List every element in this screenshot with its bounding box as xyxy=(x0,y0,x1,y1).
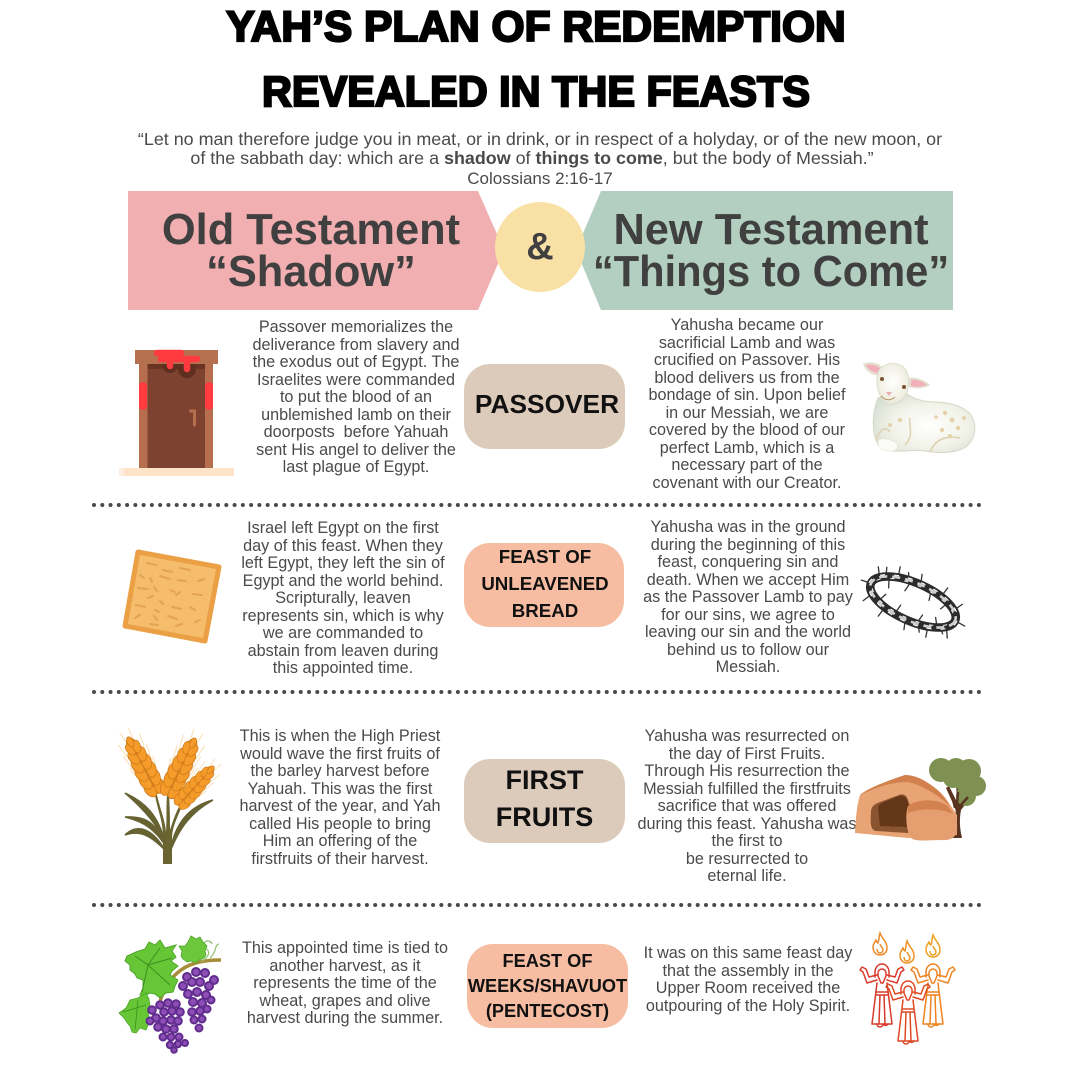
heading: new testament things to come: “Things to Come” xyxy=(593,248,949,296)
text: first fruits new testament: during this feast. Yahusha was xyxy=(638,814,856,832)
pill: feast of weeks: FEAST OF xyxy=(503,950,592,970)
text: unleavened bread old testament: left Egypt, they left the sin of xyxy=(241,554,445,572)
text: weeks new testament xyxy=(644,944,852,1014)
text: passover new testament: crucified on Passover. His xyxy=(654,351,840,369)
pill: passover: PASSOVER xyxy=(475,389,619,419)
text: first fruits old testament: Yahuah. This was the first xyxy=(248,780,432,798)
text: first fruits old testament xyxy=(240,727,440,868)
scripture quote xyxy=(138,129,942,188)
pill: feast of unleavened bread: BREAD xyxy=(512,600,578,620)
ampersand circle xyxy=(495,202,585,292)
text: unleavened bread old testament: Egypt and the world behind. xyxy=(243,572,443,590)
text: weeks old testament: harvest during the summer. xyxy=(247,1009,443,1027)
text: weeks old testament: wheat, grapes and olive xyxy=(260,992,430,1010)
icon: matzah bread xyxy=(122,550,222,644)
text: first fruits old testament: would wave the first fruits of xyxy=(240,744,440,762)
text: weeks new testament: outpouring of the Holy Spirit. xyxy=(646,996,850,1014)
pill: feast of unleavened bread xyxy=(464,543,624,627)
title line 1: YAH’S PLAN OF REDEMPTION xyxy=(226,4,846,51)
text: unleavened bread new testament: Messiah. xyxy=(716,658,780,676)
text: first fruits old testament: firstfruits of their harvest. xyxy=(251,850,429,868)
scripture quote: of the sabbath day: which are a shadow of things to come, but the body of Messiah.” xyxy=(190,148,874,168)
text: passover old testament: Passover memorializes the xyxy=(259,318,453,336)
text: unleavened bread old testament: Israel left Egypt on the first xyxy=(247,519,439,537)
text: unleavened bread new testament: death. When we accept Him xyxy=(647,570,849,588)
icon: three people with flames xyxy=(859,930,956,1045)
banner: old testament arrow shape xyxy=(128,191,498,310)
heading: old testament shadow: Old Testament xyxy=(162,206,460,254)
text: weeks old testament: another harvest, as it xyxy=(269,956,421,974)
pill: feast of weeks: WEEKS/SHAVUOT xyxy=(468,976,627,996)
icon: lamb xyxy=(863,362,976,454)
text: first fruits new testament: Through His resurrection the xyxy=(644,762,850,780)
text: unleavened bread new testament xyxy=(643,518,853,676)
icon: crown of thorns xyxy=(860,566,966,639)
text: unleavened bread new testament: for our sins, we agree to xyxy=(661,606,835,624)
text: passover new testament: perfect Lamb, which is a xyxy=(660,438,834,456)
text: weeks new testament: It was on this same feast day xyxy=(644,944,852,962)
scripture quote: Colossians 2:16-17 xyxy=(467,169,613,188)
text: passover new testament: sacrificial Lamb and was xyxy=(659,334,835,352)
text: unleavened bread new testament: behind us to follow our xyxy=(667,640,829,658)
text: unleavened bread old testament: Scripturally, leaven xyxy=(275,589,411,607)
text: first fruits new testament: be resurrected to xyxy=(686,850,808,868)
banner: new testament arrow shape xyxy=(582,191,953,310)
text: first fruits old testament: Him an offering of the xyxy=(263,832,417,850)
text: first fruits old testament: called His people to bring xyxy=(249,814,431,832)
pill: feast of unleavened bread: FEAST OF xyxy=(499,546,591,566)
text: weeks old testament: This appointed time is tied to xyxy=(242,939,448,957)
pill: passover xyxy=(464,364,625,449)
text: passover old testament xyxy=(252,318,459,476)
text: passover new testament: in our Messiah, we are xyxy=(666,404,828,422)
ampersand circle: & xyxy=(526,226,554,268)
icon: wheat stalks xyxy=(118,728,222,864)
text: unleavened bread old testament: represents sin, which is why xyxy=(242,606,444,624)
pill: first fruits: FRUITS xyxy=(496,802,593,832)
text: first fruits new testament: the day of First Fruits. xyxy=(669,744,825,762)
text: passover new testament xyxy=(648,316,846,492)
text: passover old testament: sent His angel to deliver the xyxy=(256,440,456,458)
text: unleavened bread new testament: during the beginning of this xyxy=(651,536,845,554)
heading: old testament shadow: “Shadow” xyxy=(206,248,416,296)
text: weeks old testament xyxy=(242,939,448,1027)
text: passover new testament: necessary part of the xyxy=(671,456,823,474)
pill: first fruits: FIRST xyxy=(506,764,584,794)
text: passover old testament: to put the blood of an xyxy=(280,388,432,406)
text: unleavened bread new testament: Yahusha was in the ground xyxy=(650,518,845,536)
text: first fruits new testament: the first to xyxy=(711,832,783,850)
icon: blood-marked door xyxy=(119,350,234,476)
title line 2: REVEALED IN THE FEASTS xyxy=(262,69,810,116)
text: weeks new testament: that the assembly in the xyxy=(663,962,833,980)
text: unleavened bread old testament: day of this feast. When they xyxy=(243,536,443,554)
text: unleavened bread old testament: abstain from leaven during xyxy=(248,642,438,660)
text: passover old testament: doorposts before Yahuah xyxy=(264,423,448,441)
text: weeks old testament: represents the time of the xyxy=(253,974,437,992)
row divider 2 xyxy=(92,690,981,694)
heading: new testament things to come xyxy=(593,206,949,296)
heading: new testament things to come: New Testament xyxy=(613,206,929,254)
text: passover new testament: covered by the blood of our xyxy=(649,421,845,439)
text: unleavened bread new testament: as the Passover Lamb to pay xyxy=(643,588,853,606)
pill: first fruits xyxy=(464,759,625,843)
text: first fruits old testament: harvest of the year, and Yah xyxy=(240,797,440,815)
text: passover old testament: last plague of Egypt. xyxy=(283,458,429,476)
text: passover old testament: Israelites were commanded xyxy=(257,370,455,388)
icon: empty tomb and tree xyxy=(855,758,986,840)
text: passover new testament: bondage of sin. Upon belief xyxy=(648,386,846,404)
text: passover new testament: blood delivers us from the xyxy=(654,368,840,386)
text: unleavened bread old testament: we are commanded to xyxy=(263,624,423,642)
text: first fruits new testament: Messiah fulfilled the firstfruits xyxy=(643,780,851,798)
text: passover new testament: covenant with our Creator. xyxy=(653,474,841,492)
text: first fruits old testament: the barley harvest before xyxy=(250,762,430,780)
text: unleavened bread old testament: this appointed time. xyxy=(273,659,413,677)
text: passover new testament: Yahusha became our xyxy=(671,316,823,334)
pill: feast of weeks xyxy=(467,944,628,1028)
heading: old testament shadow xyxy=(162,206,460,296)
text: passover old testament: the exodus out of Egypt. The xyxy=(253,353,459,371)
icon: grape vine xyxy=(118,935,221,1054)
text: first fruits new testament xyxy=(638,727,856,885)
text: first fruits new testament: eternal life. xyxy=(707,867,787,885)
text: first fruits old testament: This is when the High Priest xyxy=(240,727,440,745)
text: unleavened bread new testament: feast, conquering sin and xyxy=(658,553,838,571)
scripture quote: “Let no man therefore judge you in meat, or in drink, or in respect of a holyday, or of the new moon, or xyxy=(138,129,942,149)
text: weeks new testament: Upper Room received the xyxy=(656,979,840,997)
pill: feast of weeks: (PENTECOST) xyxy=(486,1000,609,1020)
text: first fruits new testament: sacrifice that was offered xyxy=(658,797,836,815)
text: unleavened bread new testament: leaving our sin and the world xyxy=(645,623,851,641)
text: passover old testament: unblemished lamb on their xyxy=(261,406,451,424)
pill: feast of unleavened bread: UNLEAVENED xyxy=(481,572,609,594)
text: unleavened bread old testament xyxy=(241,519,445,677)
row divider 1 xyxy=(92,503,981,507)
row divider 3 xyxy=(92,903,981,907)
text: first fruits new testament: Yahusha was resurrected on xyxy=(645,727,849,745)
text: passover old testament: deliverance from slavery and xyxy=(253,336,459,354)
